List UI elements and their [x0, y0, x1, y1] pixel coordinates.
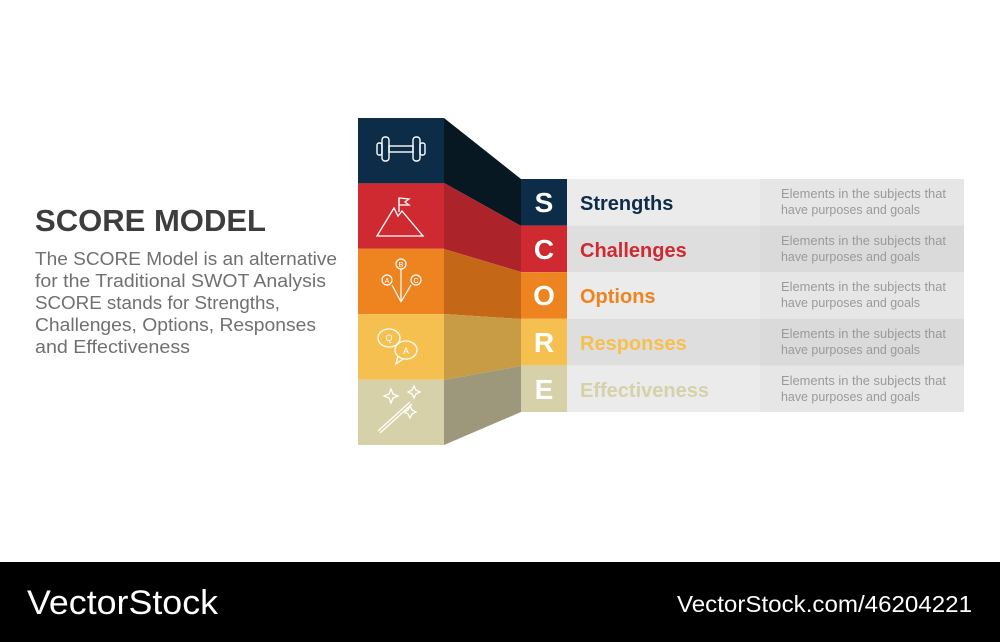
row descriptions: Elements in the subjects that — [781, 279, 946, 294]
letter tabs: S — [535, 187, 553, 218]
row descriptions: have purposes and goals — [781, 295, 920, 310]
row descriptions: Elements in the subjects that — [781, 373, 946, 388]
letter tabs: E — [535, 374, 553, 405]
letter tabs: O — [533, 280, 555, 311]
row descriptions: Elements in the subjects that — [781, 326, 946, 341]
description text: SCORE stands for Strengths, — [35, 292, 280, 313]
description text: Challenges, Options, Responses — [35, 314, 316, 335]
row descriptions: Elements in the subjects that — [781, 233, 946, 248]
footer bar: VectorStock.com/46204221 — [677, 591, 972, 617]
row headings: Effectiveness — [580, 380, 709, 402]
icon: Q&A bubbles — [378, 329, 417, 364]
footer bar — [0, 562, 1000, 642]
row descriptions: have purposes and goals — [781, 202, 920, 217]
icon column: C — [413, 278, 419, 285]
row headings: Strengths — [580, 193, 673, 215]
row descriptions: Elements in the subjects that — [781, 186, 946, 201]
letter tabs: C — [534, 234, 554, 265]
row headings — [580, 193, 709, 402]
connector bands — [444, 118, 521, 445]
description text: for the Traditional SWOT Analysis — [35, 270, 326, 291]
title: SCORE MODEL — [35, 203, 266, 238]
icon column: B — [399, 262, 404, 269]
icon: magic wand — [378, 386, 420, 433]
row headings: Challenges — [580, 240, 687, 262]
icon: mountain flag — [377, 198, 423, 236]
icon: dumbbell — [377, 137, 425, 161]
rows — [567, 179, 964, 412]
icon column: A — [385, 278, 390, 285]
row headings: Options — [580, 286, 656, 308]
description text: and Effectiveness — [35, 336, 190, 357]
footer bar: VectorStock — [27, 584, 219, 622]
row descriptions: have purposes and goals — [781, 249, 920, 264]
icon: options ABC — [382, 259, 421, 302]
row descriptions: have purposes and goals — [781, 389, 920, 404]
icon column: Q — [385, 333, 393, 343]
icon column — [358, 118, 444, 445]
row descriptions — [781, 186, 946, 404]
letter tabs — [521, 179, 567, 412]
letter tabs: R — [534, 327, 554, 358]
row headings: Responses — [580, 333, 687, 355]
row descriptions: have purposes and goals — [781, 342, 920, 357]
description text: The SCORE Model is an alternative — [35, 248, 337, 269]
description text — [35, 248, 337, 357]
icon column: A — [403, 346, 409, 356]
